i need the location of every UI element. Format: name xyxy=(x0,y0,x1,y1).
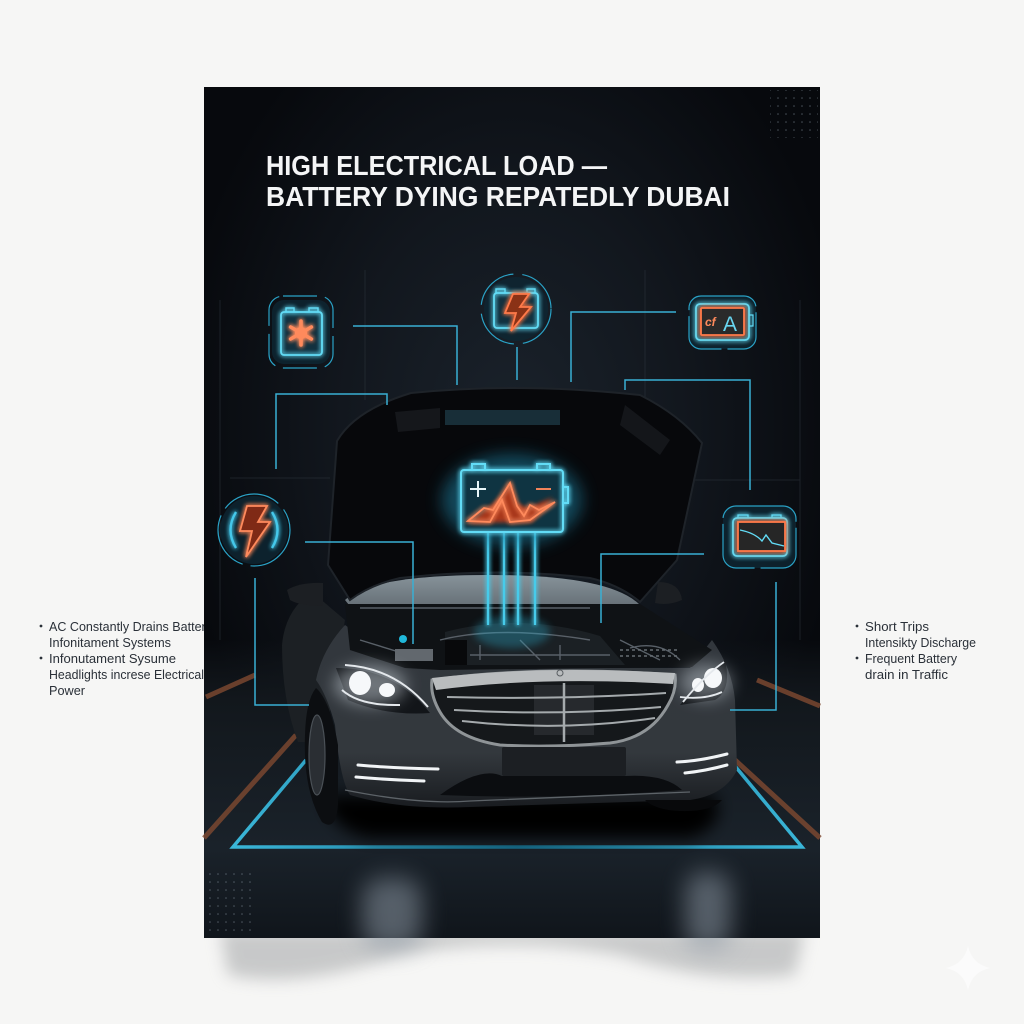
bumper lip xyxy=(345,790,690,802)
grille top chrome xyxy=(432,670,675,690)
open hood xyxy=(328,388,702,602)
right bullet list: drain in Traffic xyxy=(865,667,948,682)
lower air intake xyxy=(440,773,682,797)
rear door xyxy=(282,592,345,742)
poster wall background xyxy=(204,87,820,938)
A label: cf xyxy=(705,315,717,329)
icon: bolt in circle xyxy=(218,494,290,566)
car shadow xyxy=(325,795,718,838)
left bullet list: Infonutament Sysume xyxy=(49,651,176,666)
left bullet list xyxy=(40,619,212,698)
garage wall panels xyxy=(220,270,800,640)
snowflake xyxy=(291,321,311,345)
title: BATTERY DYING REPATEDLY DUBAI xyxy=(266,181,730,212)
icon: AC battery xyxy=(269,296,333,368)
central battery icon xyxy=(442,454,582,625)
engine blue light xyxy=(399,635,407,643)
right wheel shadow xyxy=(645,800,722,811)
left bullet list: Headlights increse Electrical xyxy=(49,667,204,682)
title xyxy=(266,150,730,212)
front wheel xyxy=(305,688,338,825)
icon: battery with bolt xyxy=(481,274,551,344)
icon: low battery chart xyxy=(723,506,796,568)
right bullet list: Intensikty Discharge xyxy=(865,635,976,650)
floor xyxy=(204,640,820,938)
windshield xyxy=(345,575,640,625)
orange floor stripes xyxy=(204,675,820,838)
left bullet list: Power xyxy=(49,683,86,698)
engine bay xyxy=(345,604,712,670)
poster drop shadow xyxy=(220,930,805,980)
title: HIGH ELECTRICAL LOAD — xyxy=(266,150,607,181)
right bullet list: Frequent Battery xyxy=(865,651,957,666)
daytime running lights xyxy=(356,754,727,781)
waveform xyxy=(468,483,555,522)
right bullet list: Short Trips xyxy=(865,619,930,634)
headlight left xyxy=(334,665,430,713)
floor light reflections xyxy=(362,872,731,950)
right bullet list xyxy=(856,619,976,682)
decorative dot grid bottom xyxy=(206,870,256,936)
grille surround xyxy=(432,671,675,746)
car body xyxy=(316,625,737,808)
bolt xyxy=(240,506,270,557)
hood underside latch detail xyxy=(445,410,560,425)
watermark sparkle xyxy=(946,946,990,990)
plus and minus xyxy=(470,481,486,497)
left bullet list: Infonitament Systems xyxy=(49,635,171,650)
icon: display battery A xyxy=(689,296,756,349)
license plate xyxy=(502,747,626,776)
bolt xyxy=(505,294,531,331)
headlight right xyxy=(680,660,732,705)
decorative dot grid top xyxy=(770,90,818,138)
discharge curve xyxy=(740,530,784,546)
grille centre block xyxy=(534,685,594,735)
side mirrors xyxy=(287,583,323,606)
poster panel xyxy=(204,87,820,950)
central battery wires xyxy=(488,532,535,625)
icon: display battery A: A xyxy=(723,313,737,336)
blue engine glow xyxy=(474,616,550,648)
emblem xyxy=(557,670,563,676)
grille slats xyxy=(447,683,666,742)
battery outline xyxy=(461,464,568,532)
left bullet list: AC Constantly Drains Battery xyxy=(49,619,212,634)
car xyxy=(282,388,737,838)
connector lines xyxy=(255,312,776,710)
blue parking outline xyxy=(233,760,802,847)
